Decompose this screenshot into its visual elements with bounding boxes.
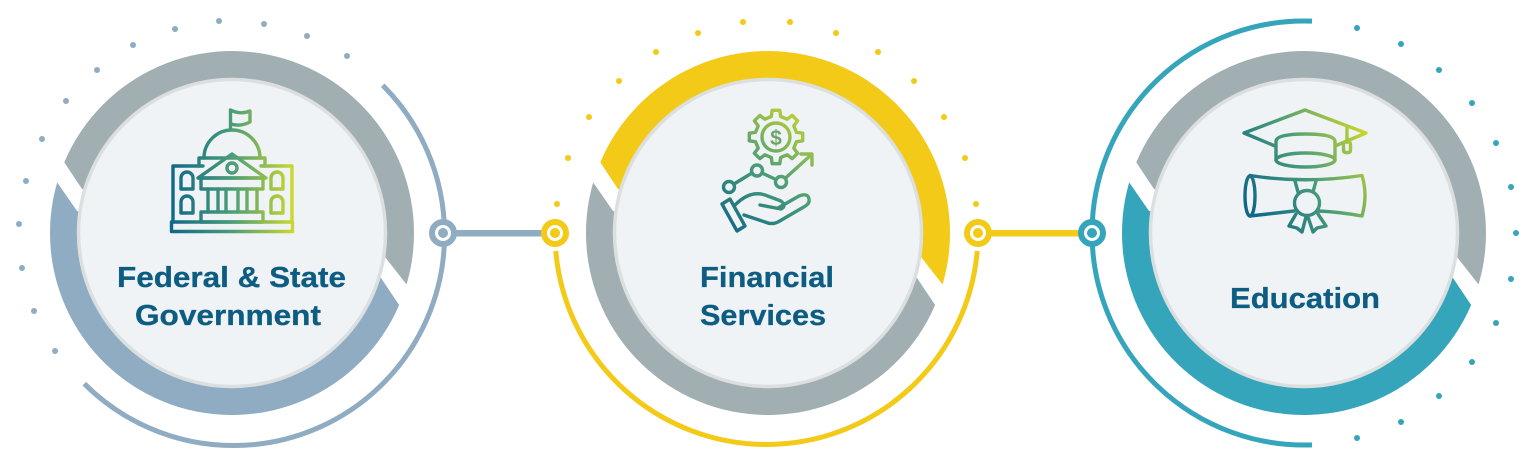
node: blue <box>432 222 454 244</box>
heading: Federal & State Government: Government <box>135 300 321 332</box>
teal ring segment <box>1122 182 1471 415</box>
heading: Financial Services: Financial <box>700 262 834 294</box>
heading: Federal & State Government <box>117 262 346 332</box>
panel: Financial Services <box>554 19 979 444</box>
thin outer arc <box>1092 21 1312 445</box>
inner circle <box>1150 80 1458 386</box>
thin outer arc <box>556 251 977 444</box>
panel: Education <box>1092 21 1519 445</box>
node: yellow <box>967 222 989 244</box>
connector: financial to education <box>967 222 1103 244</box>
yellow ring segment <box>600 51 950 284</box>
icon: government building <box>172 110 292 232</box>
heading: Financial Services <box>700 262 834 332</box>
dotted arc <box>16 18 350 354</box>
icon: gear, growth chart and hand <box>722 110 812 231</box>
connector line <box>455 230 543 236</box>
thin outer arc <box>84 85 445 446</box>
heading: Financial Services: Services <box>700 300 826 332</box>
node: teal <box>1081 222 1103 244</box>
inner circle <box>614 80 922 386</box>
panel: Federal & State Government <box>16 18 445 446</box>
heading: Federal & State Government: Federal & State <box>117 262 346 294</box>
dotted arc <box>1354 25 1519 441</box>
dollar sign: $ <box>770 127 782 150</box>
connector: government to financial <box>432 222 566 244</box>
inner circle <box>78 80 386 386</box>
connector line <box>990 230 1082 236</box>
blue ring segment <box>50 182 399 415</box>
node: yellow <box>544 222 566 244</box>
heading: Education: Education <box>1230 283 1380 315</box>
gray ring segment <box>1136 51 1486 284</box>
gray ring segment <box>586 182 935 415</box>
gray ring segment <box>64 51 414 284</box>
dotted arc <box>554 19 979 207</box>
icon: graduation cap and diploma <box>1244 110 1366 232</box>
